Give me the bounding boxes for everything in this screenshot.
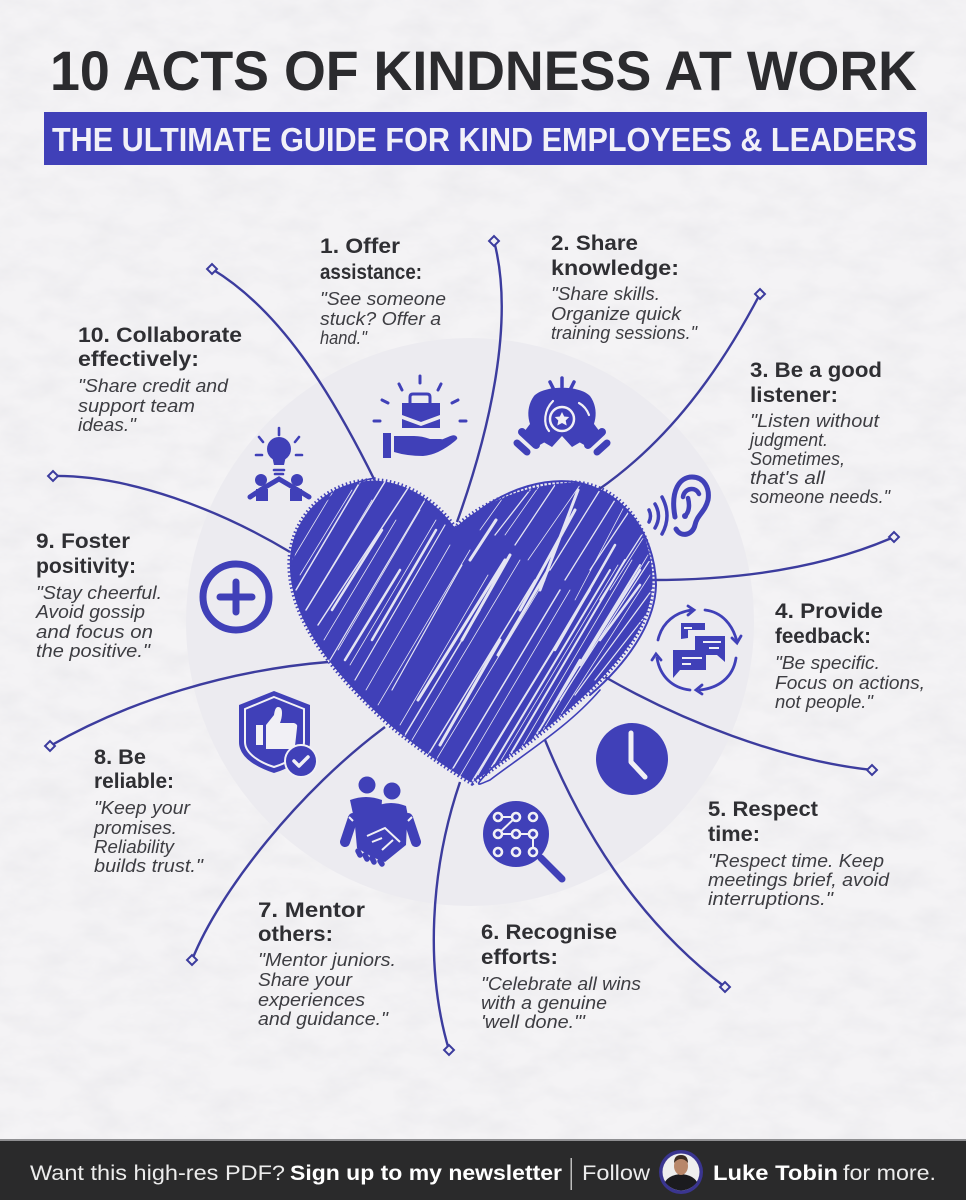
heading: assistance: — [320, 261, 422, 284]
footer bar — [0, 1139, 966, 1200]
icon: feedback chat cycle — [652, 606, 741, 694]
quote: Share your — [258, 969, 353, 990]
icon: bulb and people — [250, 428, 309, 501]
quote: "Respect time. Keep — [708, 850, 884, 871]
item 7: mentor others — [258, 899, 396, 1029]
item 3: be a good listener — [747, 359, 891, 507]
quote: builds trust." — [94, 855, 205, 876]
quote: with a genuine — [481, 992, 607, 1013]
item 6: recognise efforts — [481, 921, 641, 1032]
avatar — [659, 1150, 703, 1194]
icon: briefcase on hand — [374, 376, 466, 458]
icon: plus circle — [203, 564, 269, 630]
heading: 6. Recognise — [481, 921, 617, 944]
heading: 3. Be a good — [750, 359, 882, 382]
background circle — [186, 338, 754, 906]
quote: "Share credit and — [78, 375, 229, 396]
quote: meetings brief, avoid — [708, 869, 890, 890]
footer call to action: Follow — [582, 1162, 651, 1185]
connector lines — [45, 236, 899, 1055]
heading: 7. Mentor — [258, 899, 365, 922]
scribbled heart — [290, 478, 656, 784]
quote: ideas." — [78, 414, 137, 435]
heading: 2. Share — [551, 232, 638, 255]
quote: training sessions." — [551, 322, 698, 343]
item 1: offer assistance — [320, 235, 446, 348]
quote: judgment. — [747, 429, 828, 450]
quote: "Mentor juniors. — [258, 949, 396, 970]
footer author name: for more. — [843, 1162, 936, 1185]
heading: feedback: — [775, 625, 871, 648]
heading: 5. Respect — [708, 798, 818, 821]
quote: Focus on actions, — [775, 672, 925, 693]
quote: support team — [78, 395, 195, 416]
quote: stuck? Offer a — [320, 308, 441, 329]
quote: 'well done."' — [481, 1011, 587, 1032]
item 4: provide feedback — [775, 600, 925, 712]
quote: Avoid gossip — [35, 601, 145, 622]
item 2: share knowledge — [551, 232, 698, 343]
quote: not people." — [775, 691, 874, 712]
quote: "Stay cheerful. — [36, 582, 162, 603]
icon: thumbs-up shield — [239, 691, 317, 777]
heading: 9. Foster — [36, 530, 130, 553]
subtitle banner: THE ULTIMATE GUIDE FOR KIND EMPLOYEES & LEADERS — [52, 121, 917, 158]
item 9: foster positivity — [35, 530, 162, 661]
quote: "See someone — [320, 288, 446, 309]
quote: Sometimes, — [750, 448, 845, 469]
heading: positivity: — [36, 555, 136, 578]
quote: "Celebrate all wins — [481, 973, 641, 994]
footer call to action: Want this high-res PDF? — [30, 1162, 285, 1185]
quote: the positive." — [36, 640, 152, 661]
icon: hands holding star bulb — [517, 378, 607, 452]
quote: experiences — [258, 989, 365, 1010]
heading: 8. Be — [94, 746, 146, 769]
quote: interruptions." — [708, 888, 835, 909]
heading: others: — [258, 923, 333, 946]
quote: someone needs." — [750, 486, 891, 507]
icon: magnifier with network — [483, 801, 562, 879]
quote: hand." — [320, 327, 368, 348]
quote: promises. — [93, 817, 177, 838]
quote: "Listen without — [750, 410, 880, 431]
quote: "Keep your — [94, 797, 191, 818]
item 8: be reliable — [93, 746, 205, 876]
heading: efforts: — [481, 946, 558, 969]
icon: two people handshake — [345, 776, 416, 864]
heading: knowledge: — [551, 257, 679, 280]
heading: 4. Provide — [775, 600, 883, 623]
quote: and focus on — [36, 621, 153, 642]
quote: "Share skills. — [551, 283, 660, 304]
icon: clock — [596, 723, 668, 795]
footer call to action: Sign up to my newsletter — [290, 1162, 562, 1185]
quote: that's all — [750, 467, 826, 488]
heading: effectively: — [78, 348, 199, 371]
icon: ear and sound waves — [649, 477, 708, 534]
quote: Reliability — [94, 836, 176, 857]
item 10: collaborate effectively — [78, 324, 242, 435]
heading: listener: — [750, 384, 838, 407]
heading: 1. Offer — [320, 235, 400, 258]
footer author name: Luke Tobin — [713, 1162, 838, 1185]
heading: 10. Collaborate — [78, 324, 242, 347]
subtitle banner — [44, 112, 927, 165]
quote: "Be specific. — [775, 652, 880, 673]
item 5: respect time — [708, 798, 890, 909]
heading: reliable: — [94, 770, 174, 793]
heading: time: — [708, 823, 760, 846]
title: 10 ACTS OF KINDNESS AT WORK — [50, 39, 917, 102]
quote: Organize quick — [551, 303, 683, 324]
quote: and guidance." — [258, 1008, 390, 1029]
